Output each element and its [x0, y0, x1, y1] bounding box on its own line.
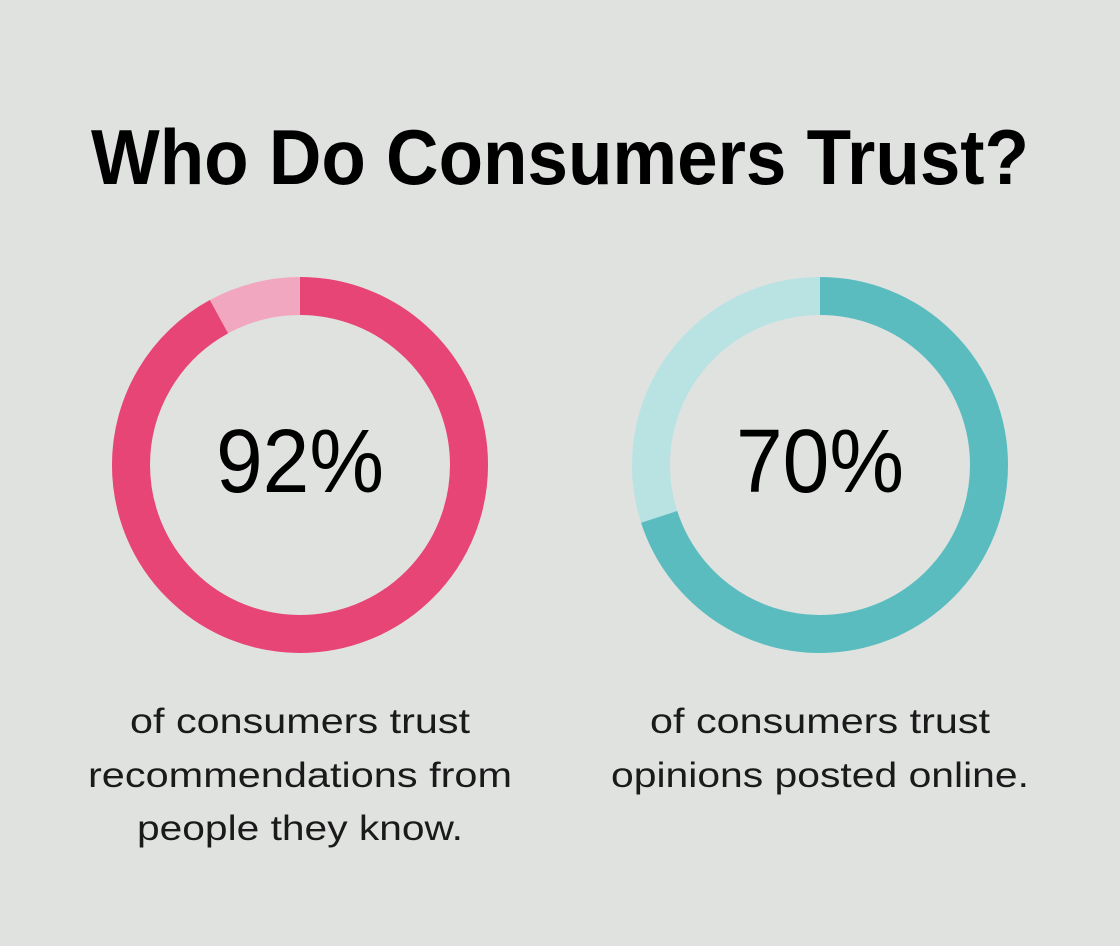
caption: right: opinions posted online. — [611, 756, 1029, 795]
percentage: 92%: 92% — [216, 412, 384, 512]
caption: left: recommendations from — [88, 756, 512, 795]
panel: 70% donut — [651, 296, 989, 634]
caption: left — [88, 702, 512, 848]
title: Who Do Consumers Trust? — [91, 113, 1029, 201]
caption: left: people they know. — [137, 809, 463, 848]
percentage: 70%: 70% — [736, 412, 904, 512]
panel: 92% donut — [131, 296, 469, 634]
caption: left: of consumers trust — [130, 702, 470, 741]
caption: right: of consumers trust — [650, 702, 990, 741]
caption: right — [611, 702, 1029, 795]
